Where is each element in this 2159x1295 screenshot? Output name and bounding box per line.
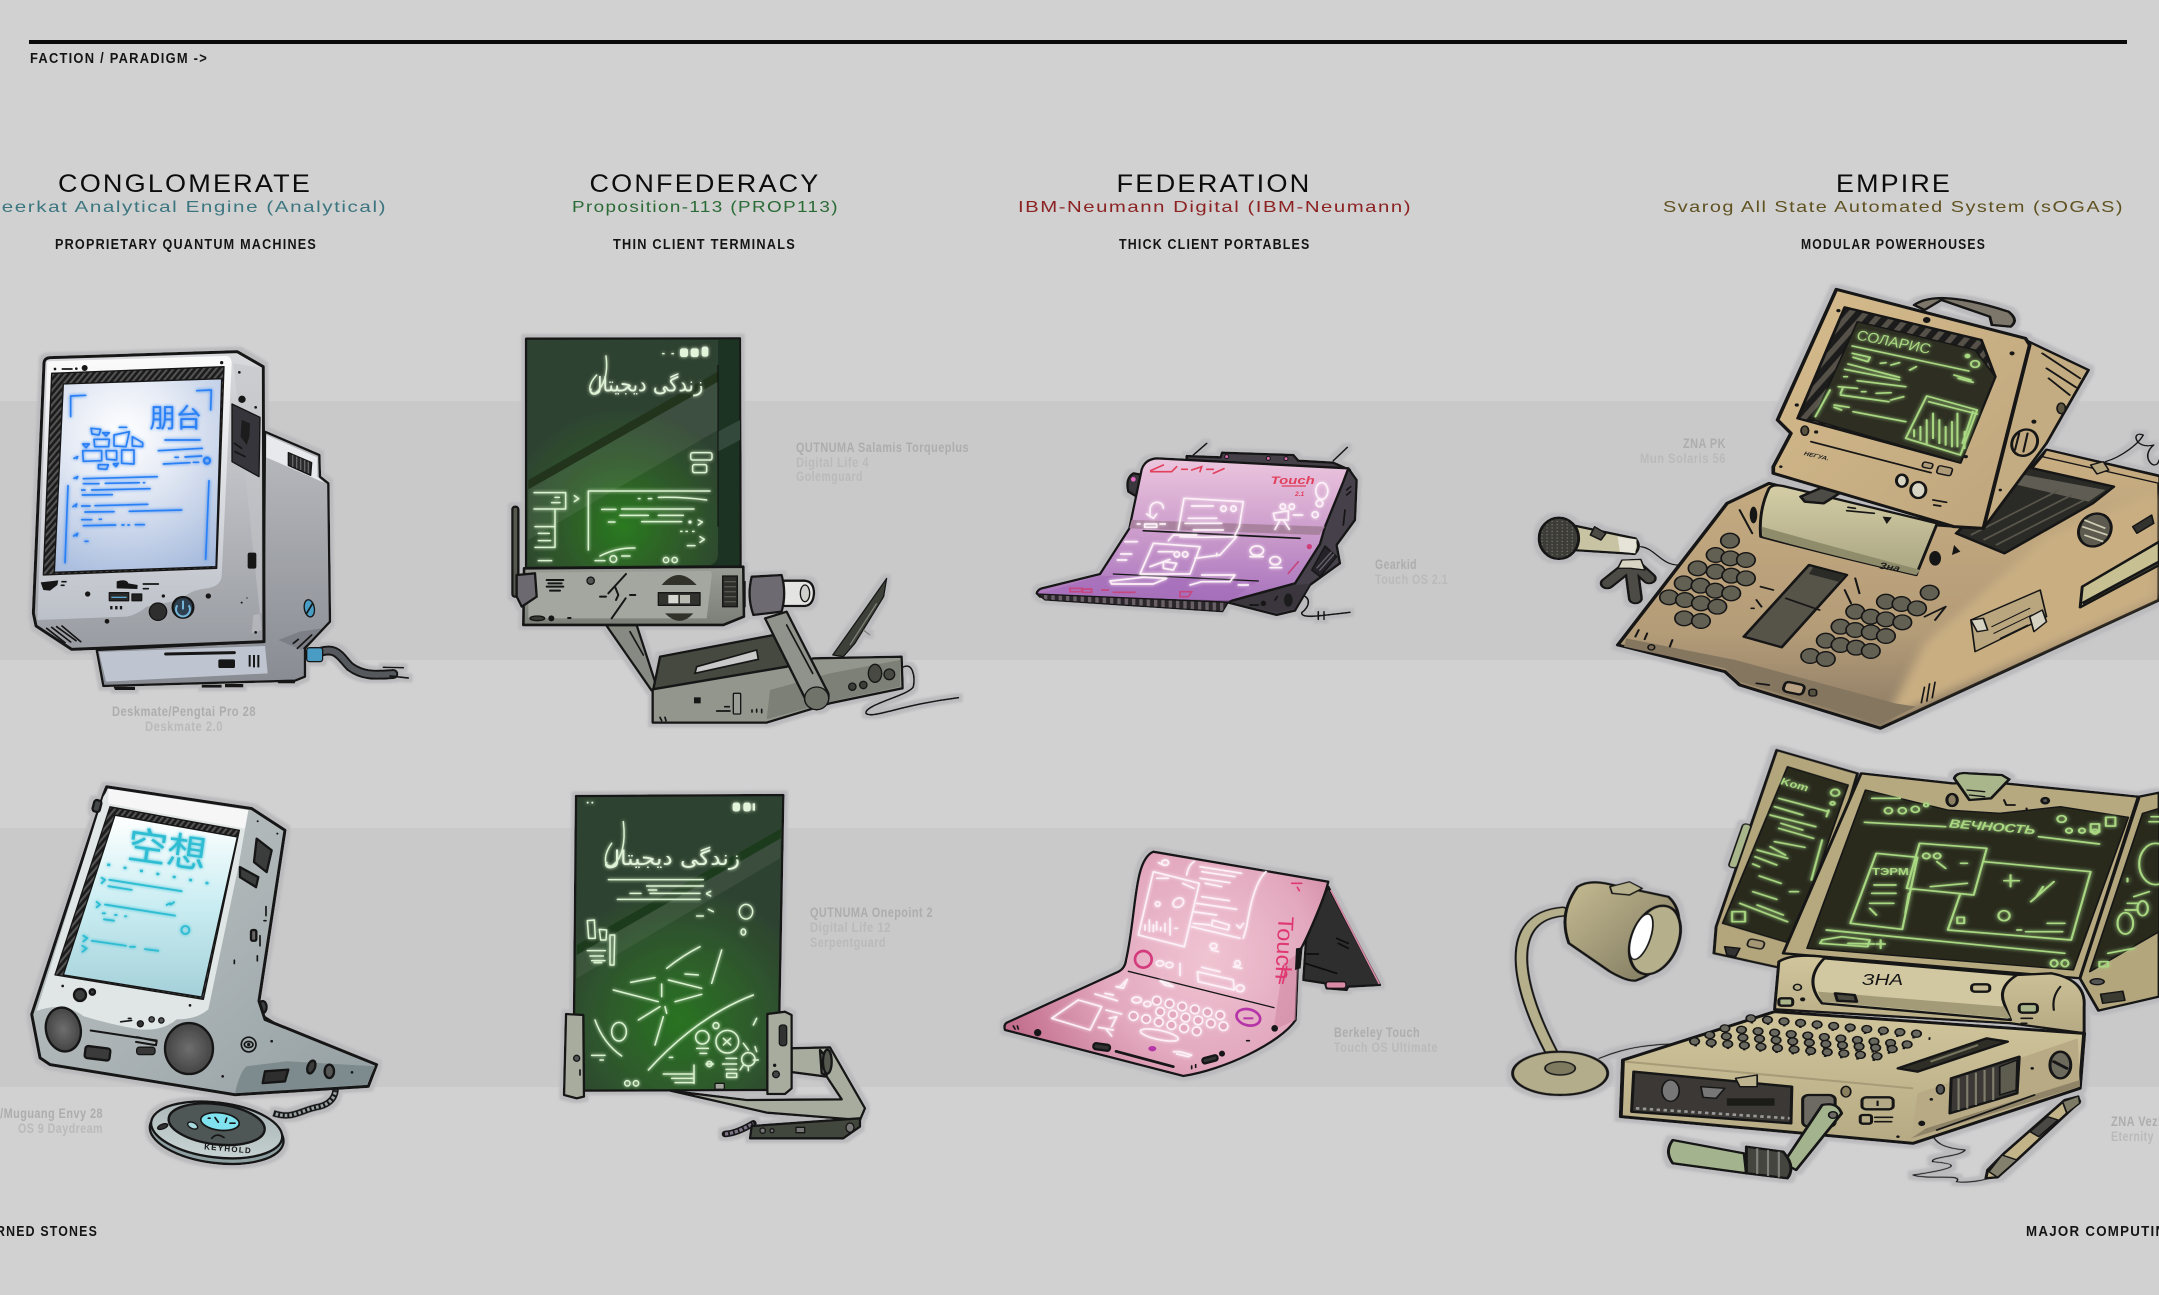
column header: conglomerate [0,170,387,253]
column header: empire: Svarog All State Automated System (sOGAS) [1663,199,2124,216]
label: QUTNUMA Onepoint: QUTNUMA Onepoint 2 [810,904,933,920]
monitor [1773,289,2089,528]
side stylus [512,507,518,597]
label: QUTNUMA Salamis: QUTNUMA Salamis Torqueplus [796,439,969,455]
row band: lower [0,828,2159,1087]
lamp [1512,882,1689,1095]
main screen: ВЕЧНОСТЬ [1948,816,2036,837]
label: ZNA Vezha [2111,1113,2159,1144]
label: Gearkid [1375,556,1448,587]
device: ZNA Vezha [1512,750,2159,1182]
column header: empire [1663,170,2124,253]
device: QUTNUMA Onepoint 2 [564,795,865,1138]
label: Gearkid: Gearkid [1375,556,1417,572]
label: Berkeley Touch: Berkeley Touch [1334,1024,1420,1040]
label: QUTNUMA Salamis: Golemguard [796,468,863,484]
column header: confederacy: THIN CLIENT TERMINALS [613,237,796,253]
stylus [1986,1096,2080,1178]
rear io panel [1632,1072,1792,1123]
device: Deskmate/Pengtai Pro 28 [33,352,408,690]
screen: 朋台 [149,396,202,435]
right clamp [767,1012,792,1094]
side ports [1295,947,1303,970]
label: Deskmate/Pengtai: Deskmate/Pengtai Pro 28 [112,703,256,719]
screen: 空想 [124,814,211,881]
optical tube [778,581,814,606]
label: ZNA PK: Mun Solaris 56 [1640,450,1726,466]
left clamp [564,1014,584,1098]
front body [33,352,264,649]
device: Muguang Envy 28 [32,787,377,1171]
paper roll [1760,485,1937,575]
side port [232,404,260,477]
screen [55,807,239,999]
column header: federation: IBM-Neumann Digital (IBM-Neumann) [1018,199,1412,216]
note plate [1971,590,2047,652]
column header: conglomerate: CONGLOMERATE [58,170,312,198]
side vent and dial [1950,1057,2019,1113]
keypad rail [263,1016,307,1046]
column header: federation: FEDERATION [1116,170,1312,198]
label: Berkeley Touch [1334,1024,1438,1055]
main screen [1783,773,2138,978]
screen [526,338,741,568]
column header: empire: MODULAR POWERHOUSES [1801,237,1986,253]
hinge roll [1775,956,2084,1033]
front controls [41,580,138,591]
monitor screen [1798,307,1995,463]
row band: upper [0,401,2159,660]
screen [43,367,224,575]
base [99,646,268,682]
label: ZNA PK [1640,435,1726,466]
axis label: FACTION / PARADIGM -> [30,51,208,67]
screen: Touch [1271,475,1315,487]
body [32,787,377,1095]
label: QUTNUMA Onepoint: Digital Life 12 [810,919,891,935]
screen: زندگی دیجیتال [588,373,703,397]
column header: conglomerate: PROPRIETARY QUANTUM MACHINES [55,237,317,253]
column header: confederacy: Proposition-113 (PROP113) [572,199,839,216]
fold screen: Touch [1270,916,1299,980]
left wing: Kom [1779,777,1810,794]
keys left [1660,533,1755,628]
rear stand [1303,887,1380,990]
right tray [2080,542,2159,607]
label: QUTNUMA Onepoint: Serpentguard [810,934,886,950]
device: QUTNUMA Salamis Torqueplus [512,338,958,723]
hand crank [1668,1095,1842,1178]
column header: confederacy: CONFEDERACY [590,170,820,198]
monitor: НЕГУА. [1803,451,1830,462]
screen: زندگی دیجیتال [603,846,740,870]
device: ZNA PK: Зна [1878,561,1901,574]
column header: federation: THICK CLIENT PORTABLES [1119,237,1310,253]
base [1618,450,2159,728]
left wing [1714,750,1858,972]
base [1621,1012,2084,1143]
device: ZNA Vezha: ЗНА [1862,971,1903,988]
label: Muguang Envy [0,1105,103,1136]
column header: federation [1018,170,1412,253]
microphone [1539,518,1649,598]
stand [670,1047,865,1120]
screen: 2.1 [1294,491,1305,498]
label: QUTNUMA Salamis: Digital Life 4 [796,454,869,470]
device: Gearkid [1037,443,1357,619]
right wing [2080,793,2159,1011]
label: QUTNUMA Salamis [796,439,969,484]
keys [1694,1018,1930,1060]
label: Muguang Envy: OS 9 Daydream [18,1120,103,1136]
front buttons [1862,1097,1893,1109]
label: Deskmate/Pengtai [112,703,256,734]
speakers [42,1004,85,1055]
screen [574,795,783,1091]
label: QUTNUMA Onepoint [810,904,933,950]
keyhold disc: KEYHOLD [204,1142,251,1155]
fold screen [1004,852,1328,1076]
label: Deskmate/Pengtai: Deskmate 2.0 [145,718,223,734]
label: ZNA PK: ZNA PK [1683,435,1726,451]
printer slot [1744,565,1847,647]
keys right [1801,585,1939,666]
main screen: ТЭРМ [1872,867,1909,878]
dark side body [1228,468,1357,615]
rear hinge [1187,453,1350,477]
device: Berkeley Touch [1004,852,1380,1076]
top rule [29,40,2127,44]
base and arms [606,625,657,691]
keyhold disc [146,1095,287,1171]
monitor: СОЛАРИС [1855,328,1933,357]
column header: confederacy [572,170,839,253]
drive bar [523,567,744,625]
device: ZNA PK [1539,289,2159,728]
stylus cable [1913,1128,1991,1182]
rear housing [97,432,330,686]
label: Berkeley Touch: Touch OS Ultimate [1334,1039,1438,1055]
column header: empire: EMPIRE [1836,170,1952,198]
label: Gearkid: Touch OS 2.1 [1375,571,1448,587]
screen [1037,458,1348,612]
